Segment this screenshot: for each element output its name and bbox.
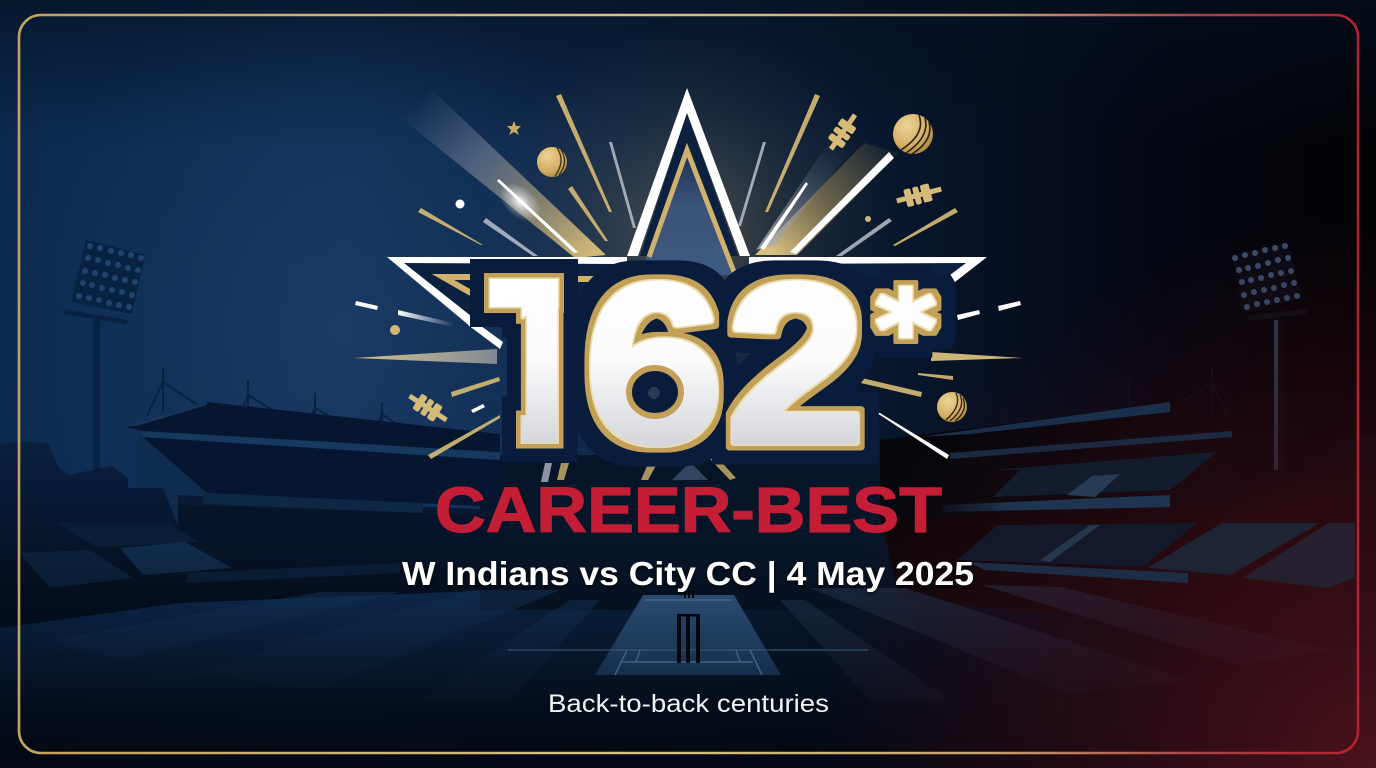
star dark body bbox=[404, 113, 966, 345]
roof underside strip left bbox=[143, 430, 500, 460]
upper stand right bbox=[880, 428, 1238, 520]
hills and ground left bbox=[0, 441, 500, 628]
six counter ring bbox=[629, 368, 681, 416]
white streaks bbox=[355, 152, 1021, 459]
number digits 62 and asterisk: * bbox=[876, 270, 936, 392]
cricket pitch bbox=[508, 590, 868, 675]
centre glow bbox=[440, 40, 940, 440]
roof underside strip right bbox=[950, 431, 1232, 459]
left light beam bbox=[400, 90, 606, 258]
icon: cricket balls bbox=[537, 114, 967, 422]
bail lower left bbox=[405, 388, 451, 428]
silver rays bbox=[483, 142, 892, 256]
bail right bbox=[894, 180, 944, 210]
roof right bbox=[880, 403, 1252, 460]
caption: Back-to-back centuries bbox=[548, 690, 829, 718]
stadium right silhouette bbox=[880, 366, 1376, 640]
lower seats right bbox=[957, 523, 1355, 588]
star emblem bbox=[387, 88, 987, 349]
heading: career-best: CAREER-BEST bbox=[435, 474, 942, 546]
field rays left bbox=[50, 590, 600, 700]
dots bbox=[390, 200, 871, 335]
right blue beam bbox=[756, 140, 852, 250]
stadium right details bbox=[920, 402, 1355, 588]
floodlight left bbox=[63, 240, 145, 476]
white star outline bbox=[387, 88, 987, 349]
roof edge right bbox=[920, 402, 1170, 437]
hills and ground right bbox=[880, 435, 1376, 640]
ray stubs below number bbox=[541, 454, 736, 482]
tier lip left bbox=[203, 493, 423, 513]
roof masts right bbox=[977, 366, 1228, 425]
centre ground block bbox=[480, 455, 900, 610]
number digits 62 and asterisk: 2 bbox=[727, 238, 865, 490]
lower stand left bbox=[178, 505, 500, 568]
subtitle: match details: W Indians vs City CC | 4 May 2025 bbox=[402, 555, 974, 592]
roof left bbox=[125, 402, 500, 452]
right gold beam bbox=[755, 143, 899, 255]
upper stand left bbox=[143, 437, 500, 507]
stand wall left bbox=[137, 437, 207, 522]
lens flare bbox=[492, 175, 548, 229]
ball upper left bbox=[537, 147, 567, 177]
ball upper right bbox=[893, 114, 933, 154]
lower fade overlay bbox=[0, 540, 1376, 768]
stumps bbox=[677, 590, 700, 663]
horizontal spikes bbox=[354, 349, 497, 364]
gold inner star bbox=[443, 150, 734, 293]
icon: cricket bails bbox=[405, 110, 944, 428]
number digit 1: 1 bbox=[471, 238, 608, 490]
bail upper bbox=[824, 110, 862, 154]
star inner fill bbox=[640, 143, 736, 275]
roof masts left bbox=[147, 367, 400, 427]
gold rays bbox=[418, 94, 958, 459]
icon: small star bbox=[507, 121, 521, 135]
starburst rays bbox=[354, 90, 1022, 482]
number digits 62 and asterisk: 6 bbox=[585, 238, 723, 490]
lower strip right bbox=[967, 562, 1188, 583]
floodlight right bbox=[1232, 242, 1307, 472]
seat panels left bbox=[20, 523, 400, 588]
ball lower right bbox=[937, 392, 967, 422]
stadium left bbox=[0, 367, 500, 628]
field rays right bbox=[780, 585, 1330, 700]
tier strip right bbox=[943, 495, 1170, 512]
upper seats right bbox=[993, 452, 1217, 497]
